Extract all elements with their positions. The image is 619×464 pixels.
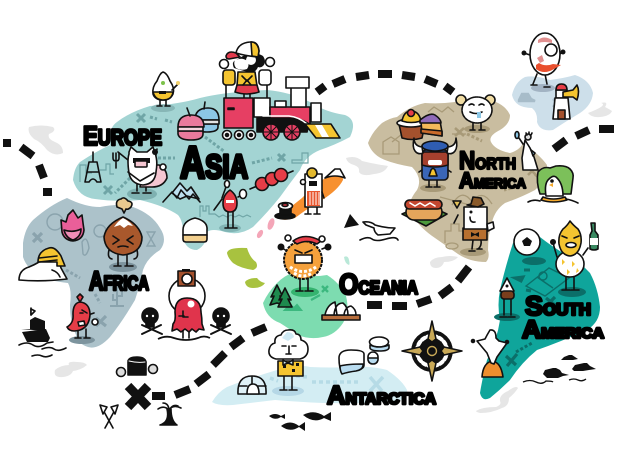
character: egg Europe <box>151 72 180 112</box>
dashed route: top arc <box>317 74 453 92</box>
character: chili Africa <box>67 294 98 344</box>
dashed route: left edge <box>3 143 52 192</box>
panel: North America landmass <box>368 99 547 262</box>
macarons <box>178 102 219 140</box>
grey clouds <box>29 102 612 413</box>
faint marks: Antarctica <box>270 376 383 391</box>
bao bun <box>183 218 207 242</box>
character: small pointy South America <box>494 278 520 321</box>
lighthouse <box>553 84 578 119</box>
character: ice cream <box>269 330 308 396</box>
faint map marks: South America <box>506 268 569 366</box>
treasure X <box>128 386 148 407</box>
Sydney opera house <box>322 302 360 320</box>
Eiffel tower <box>85 152 101 182</box>
panel: South America landmass <box>480 235 600 399</box>
Japan orange island <box>277 173 343 220</box>
character: cowboy <box>453 197 494 256</box>
skull and crossbones right <box>211 308 231 334</box>
Mount Fuji <box>325 169 345 178</box>
green islands <box>227 248 265 288</box>
character: bull <box>413 138 457 192</box>
character: soccer ball <box>514 229 546 265</box>
fish <box>269 412 331 431</box>
panel: Greenland <box>512 75 593 130</box>
label: South America: AMERICA <box>522 316 604 344</box>
crossed axes <box>100 405 118 428</box>
pine trees <box>270 285 292 307</box>
treasure chest with shells <box>116 357 158 376</box>
small island <box>344 256 350 265</box>
hot dog <box>402 200 447 226</box>
label: Africa: AFRICA <box>89 266 149 296</box>
panel: Africa landmass <box>23 198 164 348</box>
label: Antarctica: ANTARCTICA <box>327 380 436 410</box>
panel: Oceania landmass <box>263 273 347 338</box>
skull and crossbones left <box>142 308 162 334</box>
character: globe egg <box>522 33 566 92</box>
character: train rider <box>220 42 274 98</box>
sushi <box>275 202 295 219</box>
character: pig with fork <box>113 147 167 200</box>
character: lemon with bottle <box>550 221 598 297</box>
Statue of Liberty <box>515 132 538 170</box>
character: ram <box>456 95 495 133</box>
dashed route: right edge <box>554 129 614 149</box>
character: duck with backpack <box>528 166 578 203</box>
character: octopus with camera <box>158 269 210 340</box>
label: Asia: ASIA <box>180 137 248 188</box>
warning sign <box>344 214 359 228</box>
label: North America <box>459 147 526 193</box>
label: Europe: EUROPE <box>83 121 162 151</box>
boats / piranhas <box>523 355 596 383</box>
faint map marks: North America <box>383 107 540 249</box>
character: Japan robot <box>300 168 324 214</box>
faint map marks: Asia <box>80 114 308 217</box>
pirate ship <box>19 308 66 357</box>
character: Christ statue on hill <box>472 330 508 377</box>
dashed route: treasure <box>152 327 266 396</box>
character: sphinx <box>19 248 67 281</box>
ice blocks <box>339 337 389 374</box>
label: North America: AMERICA <box>459 168 526 193</box>
faint mark: Greenland <box>519 94 561 107</box>
shark <box>360 222 398 240</box>
cupcake and cake <box>397 110 442 140</box>
pink islands <box>256 217 276 239</box>
character: red chili Asia <box>214 180 246 232</box>
mountains <box>163 183 200 202</box>
label: Oceania: OCEANIA <box>339 269 418 301</box>
label: South America: SOUTH <box>525 291 591 321</box>
label: South America <box>522 291 604 344</box>
igloo <box>238 376 266 394</box>
character: orange Oceania <box>278 235 332 297</box>
panel: Asia and Europe landmass <box>73 90 353 250</box>
palm island <box>158 403 181 425</box>
character: chestnut <box>104 198 142 272</box>
lotus <box>61 210 84 241</box>
dashed route: Oceania to South America <box>367 267 469 306</box>
panel: Antarctica landmass <box>212 366 407 405</box>
train <box>222 77 340 140</box>
faint marks: Oceania <box>285 286 328 310</box>
compass rose <box>402 321 462 381</box>
faint map marks: Africa <box>33 214 155 326</box>
skewer <box>250 168 293 190</box>
label: North America: NORTH <box>459 147 516 175</box>
